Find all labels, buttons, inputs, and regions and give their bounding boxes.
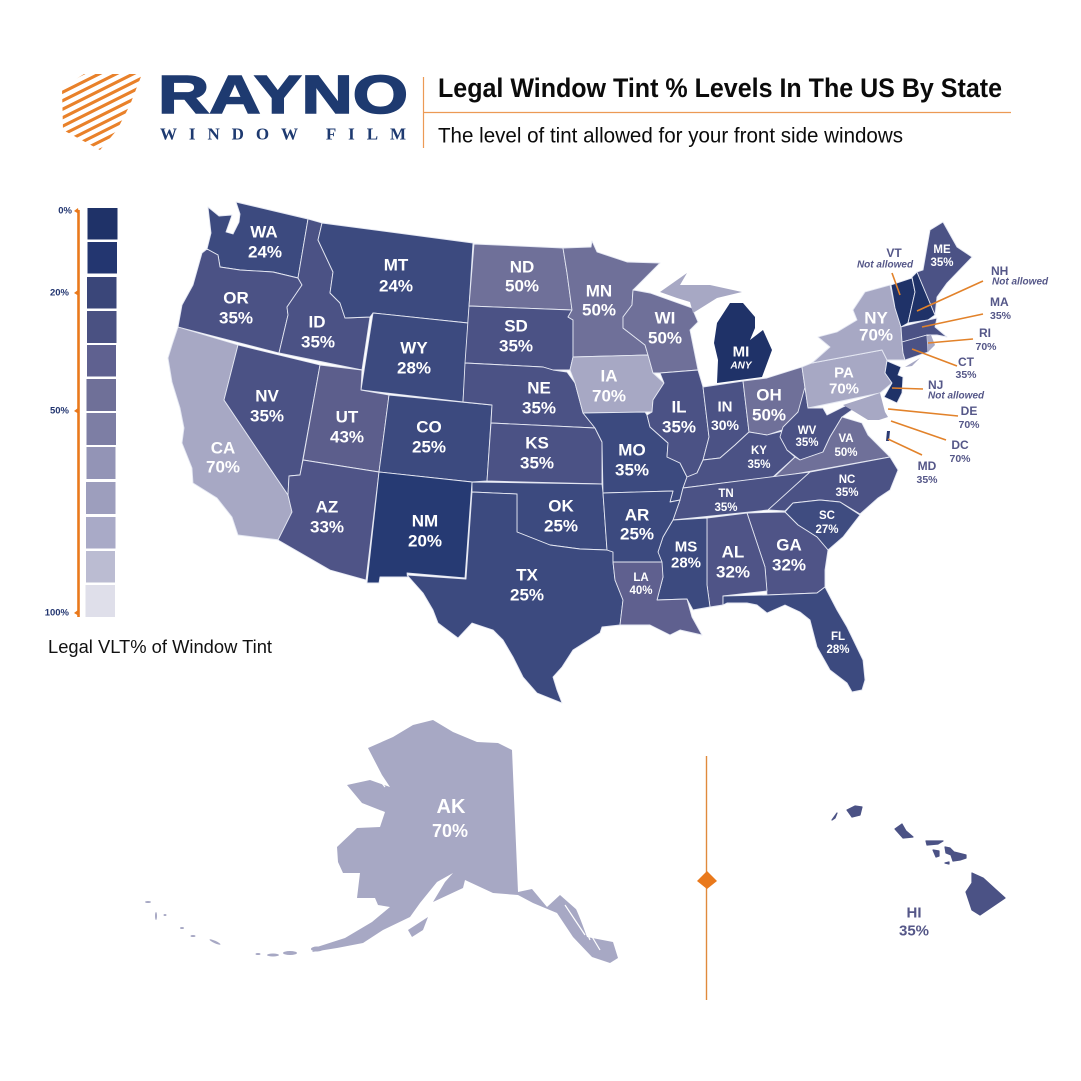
state: WY: WY bbox=[400, 338, 428, 358]
state: CO: 25% bbox=[412, 438, 446, 456]
legend scale axis bbox=[45, 206, 79, 618]
state: PA: 70% bbox=[829, 380, 859, 398]
state: UT bbox=[303, 365, 389, 472]
state: FL: 28% bbox=[826, 644, 850, 656]
infographic canvas bbox=[45, 74, 1048, 1000]
state: MT: MT bbox=[384, 256, 409, 274]
callout: NH bbox=[917, 264, 1049, 311]
state: NE: NE bbox=[527, 378, 551, 398]
callout: MA: 35% bbox=[990, 310, 1012, 322]
state: AL: 32% bbox=[716, 562, 750, 582]
state: KS bbox=[487, 423, 602, 484]
callout: MD: MD bbox=[918, 459, 937, 473]
Alaska label: AK bbox=[437, 796, 466, 818]
state: TX: 25% bbox=[510, 586, 544, 604]
state: NE bbox=[463, 363, 595, 428]
state: WV bbox=[780, 387, 852, 460]
state: MN bbox=[563, 241, 660, 357]
state: SD: 35% bbox=[499, 336, 533, 356]
subtitle: The level of tint allowed for your front side windows bbox=[438, 124, 903, 148]
state: MS: 28% bbox=[671, 554, 701, 572]
legend scale axis: 50% bbox=[50, 406, 70, 416]
state: NM: NM bbox=[412, 512, 438, 530]
state: KY: 35% bbox=[747, 459, 771, 471]
Hawaiian islands bbox=[832, 806, 1005, 915]
state: NY bbox=[812, 285, 920, 367]
state: KS: KS bbox=[525, 434, 549, 452]
state: MS: MS bbox=[675, 538, 697, 556]
state: ID: ID bbox=[308, 312, 326, 332]
Alaska mainland bbox=[312, 720, 618, 963]
legend scale axis: 20% bbox=[50, 288, 70, 298]
callout: VT bbox=[857, 246, 914, 295]
state: NM bbox=[367, 472, 472, 583]
state: MS bbox=[657, 518, 710, 610]
state: GA: GA bbox=[776, 536, 802, 554]
state: NH bbox=[908, 272, 935, 323]
state: WI bbox=[623, 290, 698, 373]
state: CA: 70% bbox=[206, 458, 240, 476]
state: VA: 50% bbox=[834, 447, 858, 459]
state: MO: 35% bbox=[615, 460, 649, 480]
state: MA bbox=[901, 318, 947, 342]
state: IL: 35% bbox=[662, 418, 696, 436]
callout: MA: MA bbox=[990, 295, 1009, 309]
Hawaii label: 35% bbox=[899, 922, 929, 940]
state: OK: 25% bbox=[544, 516, 578, 536]
Alaska inlets bbox=[378, 778, 600, 950]
callout: NH: Not allowed bbox=[992, 276, 1049, 288]
state: SD bbox=[465, 306, 573, 370]
callout: VT: Not allowed bbox=[857, 260, 914, 270]
state: IN bbox=[703, 381, 749, 460]
state: TN: TN bbox=[718, 488, 734, 500]
state: AR bbox=[603, 491, 680, 562]
state: WI: WI bbox=[655, 308, 675, 328]
legend swatches bbox=[86, 208, 118, 617]
state: AZ bbox=[278, 460, 379, 580]
callout: MD bbox=[888, 439, 938, 486]
callout: VT: VT bbox=[886, 246, 902, 260]
state: MI: ANY bbox=[729, 360, 753, 372]
callout: RI: 70% bbox=[975, 341, 997, 353]
states: DE, DC and Maryland mainland bbox=[843, 393, 888, 420]
state: ID bbox=[279, 219, 370, 370]
state: IL bbox=[647, 370, 709, 477]
state: OH: OH bbox=[756, 386, 782, 404]
state: MN: 50% bbox=[582, 300, 616, 320]
state: PA: PA bbox=[834, 364, 854, 382]
state: MO bbox=[583, 412, 687, 502]
state: AR: 25% bbox=[620, 524, 654, 544]
state: MD eastern shore sliver bbox=[886, 431, 890, 441]
state: TN bbox=[673, 472, 810, 520]
callout: MA bbox=[922, 295, 1012, 327]
state: WY bbox=[361, 313, 468, 402]
state: MI bbox=[714, 303, 772, 383]
state: ME: ME bbox=[933, 244, 951, 256]
state: GA bbox=[747, 512, 828, 595]
state: IN: 30% bbox=[711, 417, 740, 433]
callouts: small north-east states bbox=[857, 246, 1049, 486]
state: AL: AL bbox=[722, 542, 744, 562]
state: WA: 24% bbox=[248, 242, 282, 262]
state: CO bbox=[379, 395, 492, 482]
state: CA: CA bbox=[211, 438, 235, 458]
callout: CT: 35% bbox=[955, 369, 977, 381]
state: CA bbox=[168, 327, 292, 540]
state: ID: 35% bbox=[301, 332, 335, 352]
state: WV: 35% bbox=[795, 437, 819, 449]
state: GA: 32% bbox=[772, 556, 806, 574]
callout: NJ bbox=[892, 378, 985, 402]
state: WI: 50% bbox=[648, 328, 682, 348]
state: OK: OK bbox=[548, 496, 574, 516]
state: WY: 28% bbox=[397, 358, 431, 378]
state: MO: MO bbox=[618, 440, 646, 460]
state: ND bbox=[469, 244, 572, 310]
state: PA bbox=[802, 350, 892, 408]
state: OH bbox=[743, 367, 806, 435]
state: KS: 35% bbox=[520, 454, 554, 472]
state: AZ: AZ bbox=[316, 498, 338, 516]
state: MI upper peninsula bbox=[660, 273, 742, 313]
callout: CT bbox=[912, 349, 977, 381]
logo: Rayno Window Film bbox=[62, 74, 406, 150]
state: NJ bbox=[884, 361, 903, 403]
state: CO: CO bbox=[416, 418, 442, 436]
callout: DC: DC bbox=[951, 438, 969, 452]
state: NC: NC bbox=[839, 474, 855, 486]
Hawaii label bbox=[899, 904, 929, 940]
map: contiguous United States bbox=[168, 202, 972, 703]
state: IA: 70% bbox=[592, 386, 626, 406]
state: OR bbox=[178, 249, 302, 353]
state: UT: UT bbox=[336, 408, 359, 426]
state: MT bbox=[318, 223, 473, 323]
state: NY: 70% bbox=[859, 326, 893, 344]
Hawaii label: HI bbox=[906, 904, 922, 922]
state: VA bbox=[773, 417, 890, 478]
state: RI bbox=[927, 335, 935, 352]
state: KY bbox=[683, 431, 795, 488]
callout: DE: DE bbox=[961, 404, 977, 418]
state: MN: MN bbox=[586, 282, 612, 300]
state: TX: TX bbox=[516, 566, 539, 584]
state: IA: IA bbox=[600, 366, 618, 386]
state: OR: 35% bbox=[219, 308, 253, 328]
state: FL bbox=[723, 587, 865, 692]
Aleutian islands bbox=[145, 901, 323, 956]
state: IA bbox=[570, 355, 664, 413]
state: AL bbox=[707, 513, 767, 607]
state: VT bbox=[891, 278, 915, 327]
callout: NJ: Not allowed bbox=[928, 390, 985, 402]
state: NV: NV bbox=[255, 386, 279, 406]
state: NE: 35% bbox=[522, 398, 556, 418]
state: Alaska bbox=[145, 720, 618, 963]
state: CT bbox=[902, 335, 928, 360]
legend: VLT colour scale bbox=[45, 206, 272, 657]
state: FL: FL bbox=[831, 631, 845, 643]
state: ND: ND bbox=[510, 258, 534, 276]
callout: DE: 70% bbox=[958, 419, 980, 431]
state: LA: 40% bbox=[629, 585, 653, 597]
state: SD: SD bbox=[504, 316, 528, 336]
Alaska label bbox=[432, 796, 468, 841]
callout: NH: NH bbox=[991, 264, 1008, 278]
state: WA bbox=[207, 202, 308, 278]
state: NV: 35% bbox=[250, 406, 284, 426]
callout: NJ: NJ bbox=[928, 378, 943, 392]
state: LA bbox=[613, 562, 702, 635]
state: MI: MI bbox=[733, 344, 749, 360]
state: NY: NY bbox=[864, 308, 888, 328]
state: IL: IL bbox=[671, 398, 687, 416]
state: UT: 43% bbox=[330, 428, 364, 446]
state: LA: LA bbox=[633, 572, 649, 584]
state: MT: 24% bbox=[379, 276, 413, 296]
divider between Alaska and Hawaii bbox=[697, 756, 717, 1000]
Alaska label: 70% bbox=[432, 821, 468, 841]
callout: MD: 35% bbox=[916, 474, 938, 486]
state: OH: 50% bbox=[752, 406, 786, 424]
state: AZ: 33% bbox=[310, 518, 344, 536]
callout: DC bbox=[891, 421, 971, 465]
callout: RI: RI bbox=[979, 326, 991, 340]
callout: CT: CT bbox=[958, 355, 975, 369]
header divider lines bbox=[423, 77, 1011, 148]
state: ND: 50% bbox=[505, 276, 539, 296]
state: SC: 27% bbox=[815, 524, 839, 536]
icon: striped orange shield bbox=[62, 74, 141, 150]
state: WV: WV bbox=[798, 425, 817, 437]
title: Legal Window Tint % Levels In The US By State bbox=[438, 73, 1002, 103]
state: OR: OR bbox=[223, 288, 249, 308]
state: ME bbox=[917, 222, 972, 315]
legend scale axis: 0% bbox=[58, 206, 73, 216]
legend scale axis: 100% bbox=[45, 608, 70, 618]
state: AR: AR bbox=[625, 506, 649, 524]
state: KY: KY bbox=[751, 445, 767, 457]
state: Hawaii bbox=[832, 806, 1005, 940]
logo wordmark: RAYNO bbox=[158, 65, 408, 125]
state: WA: WA bbox=[250, 222, 278, 242]
state: VA: VA bbox=[838, 433, 854, 445]
callout: DE bbox=[888, 404, 980, 431]
state: NC bbox=[768, 457, 898, 514]
state: TX bbox=[407, 492, 623, 703]
state: ME: 35% bbox=[930, 257, 954, 269]
state: IN: IN bbox=[718, 398, 732, 416]
callout: DC: 70% bbox=[949, 453, 971, 465]
state: SC bbox=[785, 500, 860, 550]
state: NM: 20% bbox=[408, 532, 442, 550]
state: SC: SC bbox=[819, 510, 835, 522]
state: NV bbox=[224, 345, 320, 495]
state: NC: 35% bbox=[835, 487, 859, 499]
callout: RI bbox=[928, 326, 997, 353]
state: TN: 35% bbox=[714, 502, 738, 514]
Kodiak island bbox=[408, 917, 428, 937]
legend caption: Legal VLT% of Window Tint bbox=[48, 637, 272, 657]
state: OK bbox=[472, 482, 607, 550]
logo tagline: WINDOW FILM bbox=[160, 124, 406, 144]
